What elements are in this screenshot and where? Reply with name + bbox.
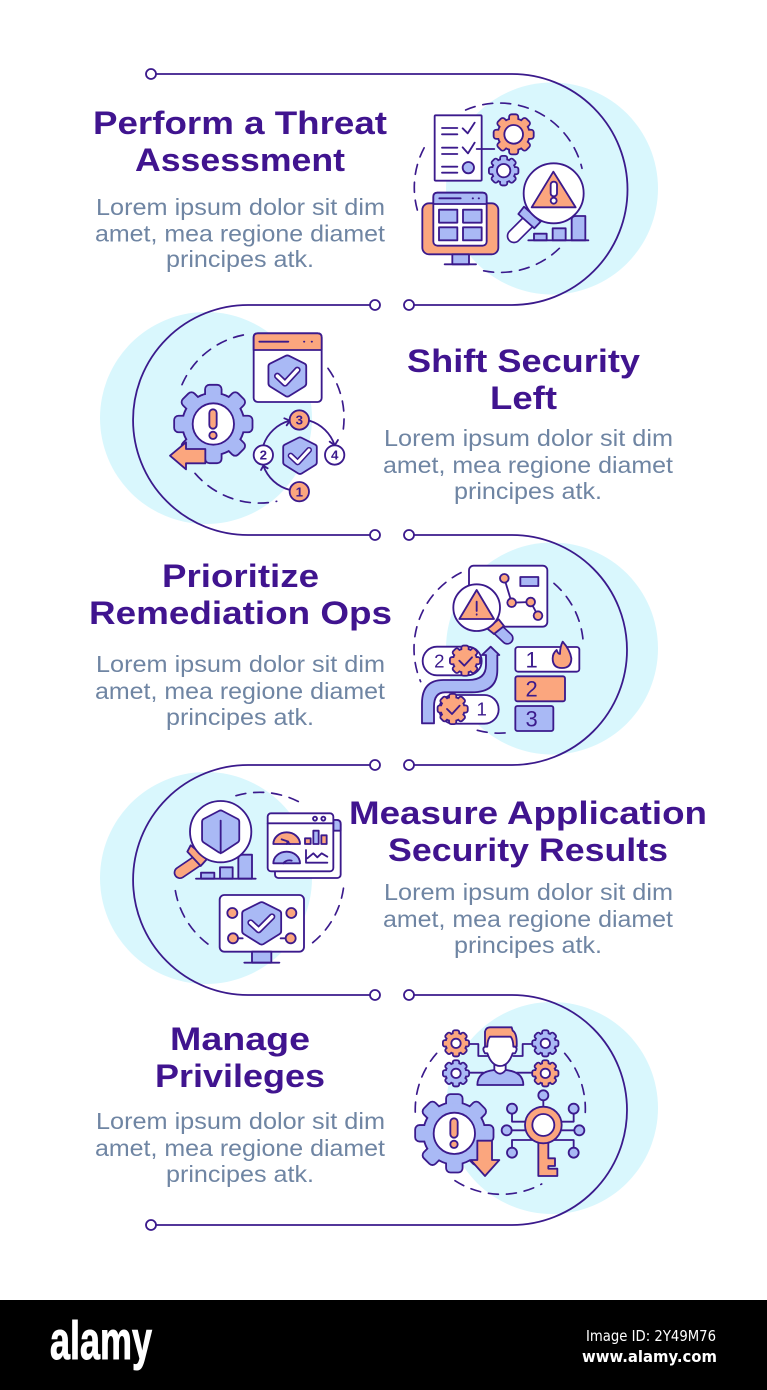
- heading: [93, 105, 387, 178]
- icon: shift left: 2: [260, 448, 267, 463]
- body text: [95, 651, 385, 730]
- icon: remediation priority: 1: [476, 699, 487, 720]
- panel: measure application security results: [175, 792, 707, 963]
- body text: [95, 1108, 385, 1187]
- connector line: [133, 69, 627, 1230]
- heading: Manage: [170, 1021, 310, 1057]
- icon: shift left: 4: [331, 448, 339, 463]
- icon: shift left: 3: [296, 413, 303, 428]
- light blue circles: [100, 82, 658, 1214]
- icon: security results: [175, 792, 344, 963]
- heading: [155, 1021, 325, 1094]
- heading: Prioritize: [162, 558, 319, 594]
- icon: shift left: 1: [296, 484, 304, 499]
- body text: amet, mea regione diamet: [95, 1135, 385, 1161]
- body text: principes atk.: [166, 704, 314, 730]
- heading: Security Results: [388, 832, 668, 868]
- heading: Perform a Threat: [93, 105, 387, 141]
- body text: principes atk.: [454, 932, 602, 958]
- body text: amet, mea regione diamet: [95, 678, 385, 704]
- body text: amet, mea regione diamet: [95, 220, 385, 246]
- heading: Shift Security: [407, 343, 640, 379]
- body text: amet, mea regione diamet: [383, 452, 673, 478]
- body text: principes atk.: [166, 246, 314, 272]
- body text: [95, 194, 385, 272]
- heading: Assessment: [135, 142, 345, 178]
- panel: prioritize remediation ops: [89, 558, 583, 733]
- body text: Lorem ipsum dolor sit dim: [384, 425, 673, 451]
- footer bar: [0, 1300, 767, 1390]
- panel: manage privileges: [95, 1021, 585, 1194]
- website: www.alamy.com: [582, 1347, 717, 1366]
- icon: threat assessment: [414, 103, 588, 272]
- body text: principes atk.: [166, 1161, 314, 1187]
- body text: principes atk.: [454, 478, 602, 504]
- icon: remediation priority: 2: [434, 651, 445, 672]
- body text: amet, mea regione diamet: [383, 906, 673, 932]
- icon: remediation priority: [414, 566, 583, 733]
- icon: remediation priority: 1: [526, 647, 538, 672]
- heading: Measure Application: [349, 795, 707, 831]
- alamy logo: alamy: [50, 1311, 152, 1371]
- body text: Lorem ipsum dolor sit dim: [96, 651, 385, 677]
- body text: Lorem ipsum dolor sit dim: [384, 879, 673, 905]
- heading: Left: [490, 380, 557, 416]
- heading: [349, 795, 707, 868]
- heading: Privileges: [155, 1058, 325, 1094]
- icon: remediation priority: 3: [526, 706, 538, 731]
- body text: Lorem ipsum dolor sit dim: [96, 1108, 385, 1134]
- heading: [407, 343, 640, 416]
- body text: Lorem ipsum dolor sit dim: [96, 194, 385, 220]
- icon: shift left: [170, 333, 344, 503]
- heading: [89, 558, 392, 631]
- heading: Remediation Ops: [89, 595, 392, 631]
- icon: privileges: [415, 1027, 585, 1194]
- panel: perform a threat assessment: [93, 103, 588, 272]
- panel: shift security left: [170, 333, 673, 504]
- icon: remediation priority: 2: [526, 677, 538, 702]
- body text: [383, 425, 673, 504]
- body text: [383, 879, 673, 958]
- image id: Image ID: 2Y49M76: [586, 1327, 716, 1345]
